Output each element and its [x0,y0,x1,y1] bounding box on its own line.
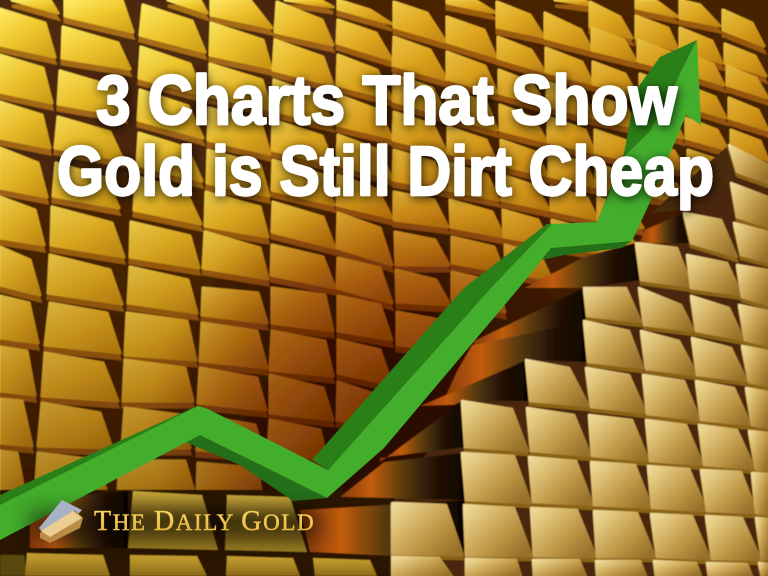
logo: The Daily Gold [30,500,320,543]
stack of gold bars on the right [300,145,768,576]
title: 3 Charts That Show [96,61,677,139]
icon: gold bar [39,500,83,543]
title [57,61,714,210]
wordmark: THE DAILY GOLD [94,506,315,537]
bottom band of gold bars behind the logo [0,490,392,576]
green rising arrow [0,40,701,540]
